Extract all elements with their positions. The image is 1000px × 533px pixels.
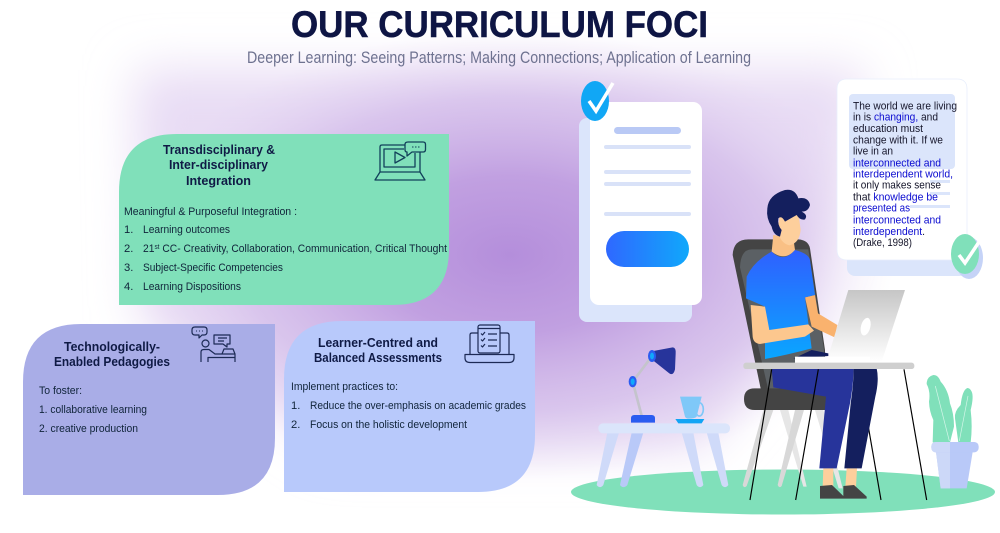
illustration: checklist card <box>579 81 702 322</box>
list: practices <box>291 381 526 431</box>
chair legs <box>743 410 843 488</box>
heading: assessments: Balanced Assessments <box>314 351 442 365</box>
heading: transdisciplinary <box>163 143 275 188</box>
quote text: interdependent. <box>853 226 925 238</box>
side table <box>597 423 730 487</box>
list: practices: Implement practices to: <box>291 381 398 393</box>
heading: pedagogies: Enabled Pedagogies <box>54 355 170 369</box>
quote text: change with it. If we <box>853 135 943 147</box>
chair back <box>733 239 825 393</box>
icon: laptop with video <box>375 142 426 180</box>
icon: blue check <box>581 81 613 121</box>
list: integration points: CC- Creativity, Collaboration, Communication, Critical Thought <box>159 243 448 255</box>
list: foster: 1. collaborative learning <box>39 404 147 416</box>
quote text: interdependent world, <box>853 169 953 181</box>
quote text: education must <box>853 123 924 135</box>
plant <box>927 375 979 488</box>
list: integration points: 3. <box>124 262 133 274</box>
panel: technologically-enabled pedagogies <box>23 324 275 495</box>
list: foster: To foster: <box>39 385 82 397</box>
list: integration points: 2. <box>124 243 133 255</box>
person upper body <box>743 190 914 369</box>
seat and legs <box>744 368 878 499</box>
list: integration points: Learning Dispositions <box>143 281 241 293</box>
list: practices: 1. <box>291 400 300 412</box>
list: practices: Reduce the over-emphasis on academic grades <box>310 400 526 412</box>
person, chair and desk, lower half <box>743 410 881 500</box>
list: integration points: Meaningful & Purposeful Integration : <box>124 206 297 218</box>
subtitle: Deeper Learning: Seeing Patterns; Making Connections; Application of Learning <box>247 49 751 67</box>
cup <box>675 397 704 423</box>
heading: pedagogies <box>54 340 170 369</box>
list: foster <box>39 385 147 435</box>
list: integration points: Learning outcomes <box>143 224 230 236</box>
heading: pedagogies: Technologically- <box>64 340 160 354</box>
heading: transdisciplinary: Transdisciplinary & <box>163 143 275 157</box>
quote text: in is changing, and <box>853 112 938 124</box>
list: foster: 2. creative production <box>39 423 138 435</box>
quote text: The world we are living <box>853 100 957 112</box>
quote text: that knowledge be <box>853 191 938 203</box>
quote text: interconnected and <box>853 214 941 226</box>
quote text: it only makes sense <box>853 180 941 192</box>
list: integration points: 4. <box>124 281 133 293</box>
list: integration points: st <box>154 244 160 251</box>
quote text: presented as <box>853 203 910 215</box>
list: integration points <box>124 206 448 293</box>
list: integration points: 21 <box>143 243 155 255</box>
lamp <box>629 347 676 423</box>
quote text: interconnected and <box>853 157 941 169</box>
illustration: floor ellipse <box>571 470 995 514</box>
desk legs <box>750 369 927 500</box>
list: integration points: Subject-Specific Competencies <box>143 262 283 274</box>
rear desk leg <box>868 427 881 500</box>
list: practices: Focus on the holistic development <box>310 419 468 431</box>
title: OUR CURRICULUM FOCI <box>291 4 708 45</box>
heading: assessments <box>314 336 442 365</box>
illustration: person at desk scene <box>597 190 979 500</box>
button <box>606 231 689 267</box>
background glow <box>125 30 895 480</box>
quote card <box>837 79 983 279</box>
heading: transdisciplinary: Inter-disciplinary <box>169 158 268 172</box>
icon: green check <box>951 234 983 279</box>
panel: transdisciplinary integration <box>119 134 449 305</box>
icon: person at desk <box>192 327 235 362</box>
list: practices: 2. <box>291 419 300 431</box>
list: integration points: 1. <box>124 224 133 236</box>
icon: laptop with checklist <box>465 325 514 362</box>
panel: learner-centred assessments <box>284 321 535 492</box>
heading: transdisciplinary: Integration <box>186 174 251 188</box>
quote text: (Drake, 1998) <box>853 237 912 249</box>
heading: assessments: Learner-Centred and <box>318 336 438 350</box>
quote text: live in an <box>853 146 893 158</box>
quote text <box>853 100 957 249</box>
